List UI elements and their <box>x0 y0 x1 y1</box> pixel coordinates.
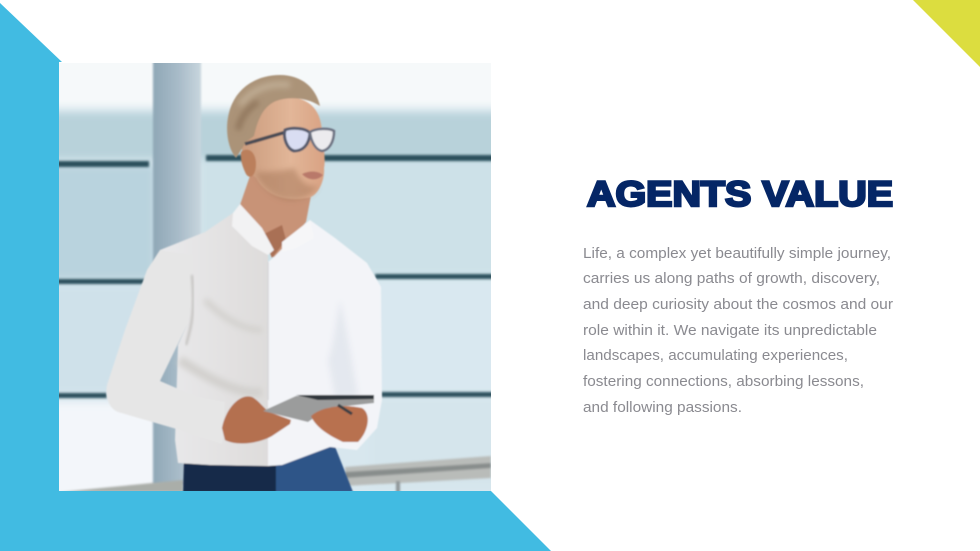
body text: Life, a complex yet beautifully simple journey, <box>583 245 891 262</box>
shirt: torso right <box>268 220 382 466</box>
shape: blue frame <box>0 3 551 551</box>
shirt: right sleeve shade <box>329 312 356 395</box>
photo background: office windows <box>59 63 491 491</box>
photo: handrail <box>60 456 491 493</box>
body text: carries us along paths of growth, discovery, <box>583 270 880 287</box>
photo: man <box>106 75 382 492</box>
photo: column <box>153 55 201 485</box>
body text: role within it. We navigate its unpredictable <box>583 322 877 339</box>
trousers <box>182 462 277 491</box>
body text: and following passions. <box>583 399 742 416</box>
title: AGENTS VALUE <box>587 175 893 214</box>
shape: yellow corner triangle <box>913 0 980 67</box>
head and face <box>240 97 325 199</box>
photo: man with tablet <box>59 63 491 491</box>
shirt: torso left <box>160 213 268 466</box>
shirt: collar <box>232 204 274 255</box>
mouth <box>302 171 323 179</box>
tablet <box>263 396 374 422</box>
right hand <box>311 406 368 442</box>
glasses <box>245 128 334 151</box>
body text: landscapes, accumulating experiences, <box>583 347 848 364</box>
left hand <box>222 396 291 443</box>
hair <box>227 75 320 158</box>
body text <box>583 245 893 416</box>
stubble <box>255 168 318 200</box>
body text: and deep curiosity about the cosmos and our <box>583 296 893 313</box>
shirt: fold shadows <box>186 275 193 345</box>
body text: fostering connections, absorbing lessons, <box>583 373 864 390</box>
neck <box>240 170 312 258</box>
photo: window frames <box>55 155 496 398</box>
ear <box>241 150 256 177</box>
shirt: left sleeve <box>106 250 188 429</box>
